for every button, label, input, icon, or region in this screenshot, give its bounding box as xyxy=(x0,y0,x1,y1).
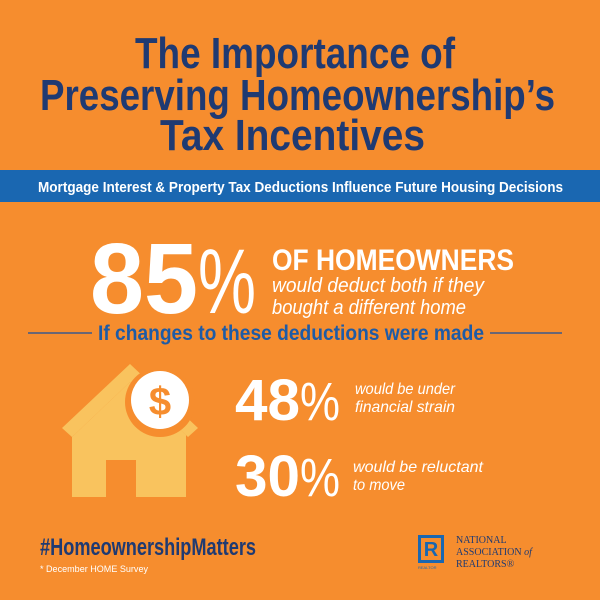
stat: 85% of homeowners: 85 xyxy=(90,223,198,335)
icon: house with dollar: $ xyxy=(149,380,171,424)
stat: 85% of homeowners: % xyxy=(198,231,256,333)
logo: NAR: ASSOCIATION of xyxy=(456,547,533,558)
stat: 85% of homeowners: bought a different home xyxy=(272,297,466,319)
stat: 48% xyxy=(235,368,456,433)
stat: 48%: 48 xyxy=(235,368,300,433)
stat: 30%: % xyxy=(300,448,340,508)
stat: 30%: to move xyxy=(353,477,405,494)
icon: house with dollar xyxy=(62,364,198,497)
logo: NAR: R xyxy=(424,539,439,561)
stat: 85% of homeowners: would deduct both if they xyxy=(272,275,485,297)
stat: 30%: would be reluctant xyxy=(353,459,484,476)
logo: NAR: REALTORS® xyxy=(456,559,515,570)
logo: NAR: NATIONAL xyxy=(456,535,507,546)
section heading: if changes: If changes to these deductions were made xyxy=(98,322,484,345)
footnote: * December HOME Survey xyxy=(40,564,149,574)
stat: 30%: 30 xyxy=(235,444,300,509)
stat: 30% xyxy=(235,444,484,509)
title xyxy=(40,29,555,160)
title: Tax Incentives xyxy=(160,111,425,160)
stat: 48%: % xyxy=(300,372,340,432)
stat: 48%: financial strain xyxy=(355,399,455,416)
title: The Importance of xyxy=(135,29,455,78)
stat: 48%: would be under xyxy=(355,381,456,398)
subtitle band xyxy=(0,170,600,202)
logo: NAR: REALTOR xyxy=(418,565,437,570)
stat: 85% of homeowners: OF HOMEOWNERS xyxy=(272,244,514,277)
stat: 85% of homeowners xyxy=(90,223,514,335)
logo: NAR xyxy=(418,535,533,570)
hashtag: #HomeownershipMatters xyxy=(40,534,256,561)
